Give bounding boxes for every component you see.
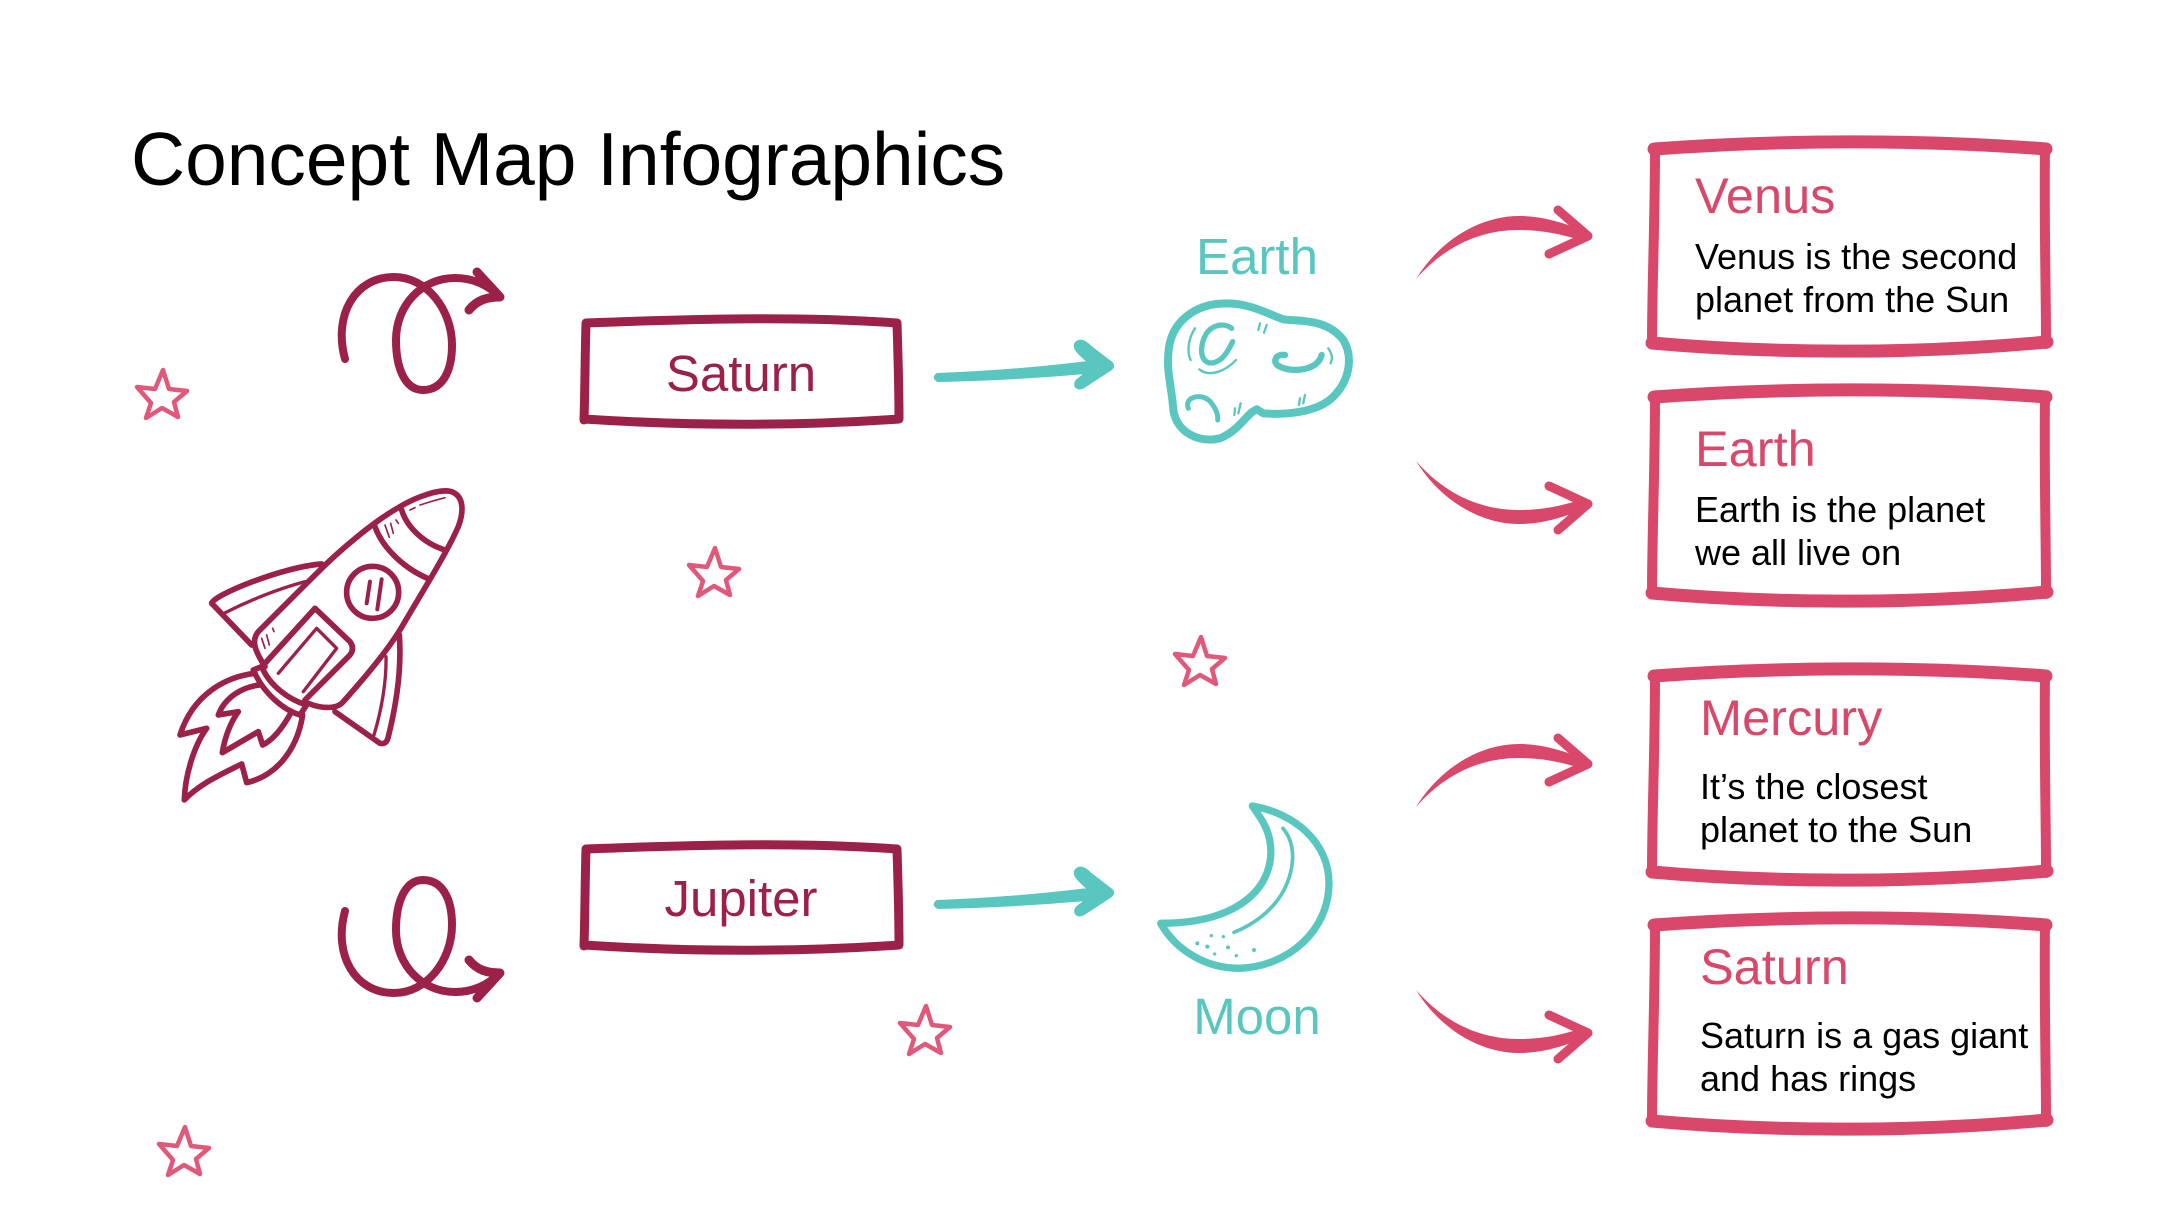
panel: Saturn [1652, 918, 2047, 1129]
box: Jupiter [584, 845, 899, 950]
panel: Saturn: Saturn [1700, 938, 1849, 995]
arrow: to Mercury [1416, 738, 1588, 807]
arrow: to Saturn [1416, 990, 1588, 1059]
panel: Venus: planet from the Sun [1695, 279, 2009, 320]
arrow: top loop [342, 272, 500, 390]
box: Saturn: Saturn [666, 345, 816, 402]
icon: star 2 [689, 548, 739, 596]
arrow: Jupiter to Moon [935, 868, 1113, 915]
arrow: bottom loop [342, 880, 500, 998]
label: Earth: Earth [1196, 228, 1318, 285]
icon: star 1 [137, 370, 187, 418]
arrow: Saturn to Earth [935, 341, 1113, 388]
icon: star 3 [1175, 637, 1225, 685]
box: Saturn [584, 319, 899, 424]
panel: Mercury: planet to the Sun [1700, 809, 1972, 850]
icon: rocket [180, 491, 462, 800]
panel: Venus [1652, 142, 2047, 351]
icon: star 5 [159, 1127, 209, 1175]
panel: Venus: Venus [1695, 167, 1835, 224]
panel: Earth [1652, 390, 2047, 601]
title: Concept Map Infographics [131, 117, 1005, 201]
panel: Earth: we all live on [1694, 532, 1901, 573]
arrow: to Earth [1416, 461, 1588, 530]
panel: Mercury [1652, 669, 2047, 880]
label: Moon: Moon [1193, 988, 1321, 1045]
panel: Earth: Earth is the planet [1695, 489, 1985, 530]
panel: Mercury: It’s the closest [1700, 766, 1927, 807]
arrow: to Venus [1416, 210, 1588, 279]
box: Jupiter: Jupiter [664, 870, 818, 927]
panel: Saturn: Saturn is a gas giant [1700, 1015, 2028, 1056]
panel: Saturn: and has rings [1700, 1058, 1916, 1099]
panel: Earth: Earth [1695, 420, 1816, 477]
panel: Venus: Venus is the second [1695, 236, 2017, 277]
panel: Mercury: Mercury [1700, 689, 1883, 746]
icon: Moon [1161, 806, 1329, 968]
icon: star 4 [900, 1006, 950, 1054]
icon: Earth asteroid [1168, 303, 1349, 440]
